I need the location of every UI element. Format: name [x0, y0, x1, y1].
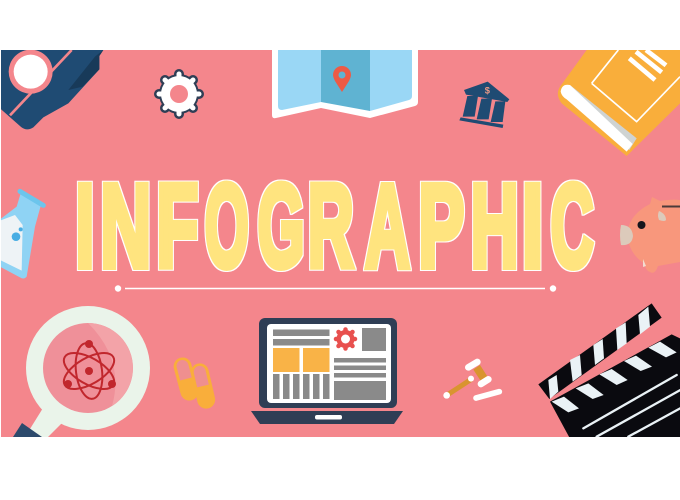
icon: camera — [0, 50, 103, 129]
icon: map pin — [333, 66, 351, 92]
icon: gavel — [443, 362, 499, 399]
icon: film clapperboard — [538, 303, 680, 442]
icon: bank building: $ — [485, 86, 491, 96]
main title: H — [471, 160, 519, 292]
icon: laptop gear — [336, 330, 355, 348]
main title: P — [418, 160, 464, 292]
main title: I — [522, 160, 543, 292]
icon: book — [558, 50, 680, 156]
icon: atom — [62, 340, 116, 400]
icon: flask — [0, 191, 43, 279]
main title: F — [156, 160, 198, 292]
banner background — [1, 50, 680, 437]
icon: laptop — [251, 318, 403, 424]
main title: N — [100, 160, 151, 292]
icon: capsules — [174, 358, 216, 409]
clapper body — [550, 334, 680, 442]
main title: G — [258, 160, 305, 292]
icon: magnifying glass with atom — [13, 306, 150, 437]
icon: piggy bank — [620, 197, 680, 273]
title underline — [115, 285, 556, 292]
main title: I — [75, 160, 94, 292]
main title: R — [308, 160, 354, 292]
icon: gear — [159, 74, 199, 114]
icon: folded map — [272, 50, 418, 118]
icon: bank building — [459, 82, 509, 128]
main title: C — [551, 160, 594, 292]
main title: O — [205, 160, 249, 292]
main title: A — [365, 160, 410, 292]
clapper stick — [538, 303, 662, 399]
